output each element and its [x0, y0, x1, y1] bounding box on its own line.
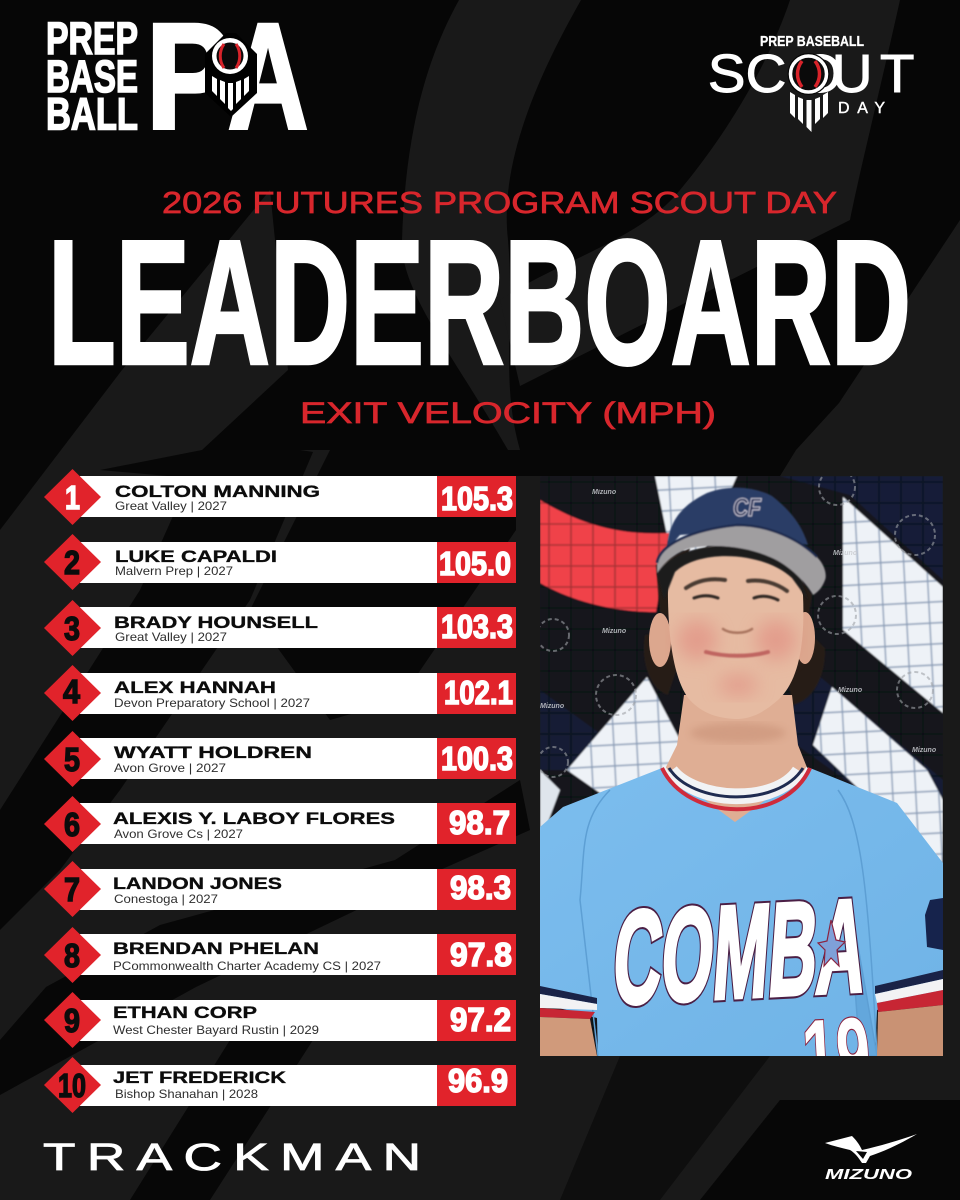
- player cap: [657, 488, 826, 600]
- row 3: 3: [64, 610, 80, 647]
- row 3: 103.3: [441, 608, 513, 645]
- row 6: 98.7: [449, 804, 510, 841]
- row 9: 9: [64, 1002, 80, 1039]
- jersey lettering: Combat: [614, 896, 864, 1008]
- jersey star: [818, 920, 845, 966]
- row 1: Great Valley | 2027: [115, 499, 227, 513]
- row 5: Avon Grove | 2027: [114, 761, 226, 775]
- logo wordmark: Prep Base Ball: BALL: [46, 88, 138, 140]
- left arm: [540, 1017, 597, 1056]
- row 8: 8: [64, 937, 80, 974]
- logo text: Day: DAY: [838, 100, 885, 117]
- row 5: WYATT HOLDREN: [114, 743, 312, 762]
- logo: Prep Baseball Scout Day: [708, 33, 915, 132]
- row 5: [44, 731, 516, 787]
- row 3: [44, 600, 516, 656]
- row 8: PCommonwealth Charter Academy CS | 2027: [113, 959, 381, 973]
- row 6: ALEXIS Y. LABOY FLORES: [113, 809, 395, 828]
- row 4: Devon Preparatory School | 2027: [114, 696, 310, 710]
- logo: Prep Baseball PA: [46, 0, 308, 160]
- backdrop marks: Mizuno: [540, 703, 565, 710]
- row 1: 1: [65, 479, 80, 516]
- right sleeve stripes: [875, 970, 943, 1012]
- logo text: Mizuno: MIZUNO: [825, 1166, 912, 1183]
- row 4: ALEX HANNAH: [114, 678, 276, 697]
- row 4: 102.1: [444, 674, 513, 711]
- row 1: 105.3: [441, 480, 513, 517]
- icon: scout baseball shield: [788, 53, 830, 132]
- row 4: [44, 665, 516, 721]
- player jersey: [540, 766, 943, 1056]
- row 8: [44, 927, 516, 983]
- row 3: BRADY HOUNSELL: [114, 613, 318, 632]
- row 7: [44, 861, 516, 917]
- row 2: 2: [64, 544, 80, 581]
- backdrop marks: Mizuno: [912, 747, 937, 754]
- row 2: LUKE CAPALDI: [115, 547, 277, 566]
- subheading: Exit Velocity (MPH): EXIT VELOCITY (MPH): [300, 397, 716, 430]
- row 2: [44, 534, 516, 590]
- row 10: [44, 1057, 516, 1113]
- face blush: [677, 620, 796, 695]
- jersey seams: [580, 790, 877, 1056]
- row 9: [44, 992, 516, 1048]
- left sleeve stripes: [540, 986, 597, 1019]
- row 2: 105.0: [439, 545, 511, 582]
- heading: event name: 2026 FUTURES PROGRAM SCOUT DAY: [162, 185, 837, 220]
- row 10: 96.9: [448, 1062, 508, 1099]
- jersey number: 19: [799, 996, 873, 1116]
- player face: [668, 545, 803, 719]
- row 9: West Chester Bayard Rustin | 2029: [113, 1023, 319, 1037]
- row 6: [44, 796, 516, 852]
- logo wordmark: Prep Base Ball: PREP: [46, 13, 138, 64]
- backdrop marks: Mizuno: [602, 628, 627, 635]
- logo wordmark: Prep Base Ball: [46, 13, 138, 140]
- row 10: JET FREDERICK: [113, 1068, 287, 1087]
- player photo: [540, 476, 943, 1056]
- row 9: 97.2: [450, 1001, 511, 1038]
- undershirt and collar: [662, 768, 810, 809]
- logo: Mizuno: [825, 1134, 917, 1183]
- logo small text: Prep Baseball: PREP BASEBALL: [760, 33, 864, 50]
- backdrop marks: Mizuno: [592, 489, 617, 496]
- row 5: 100.3: [441, 740, 513, 777]
- backdrop logos: [537, 469, 935, 777]
- row 8: 97.8: [450, 936, 512, 973]
- row 1: [44, 469, 516, 525]
- backdrop marks: Mizuno: [838, 687, 863, 694]
- row 7: LANDON JONES: [113, 874, 282, 893]
- row 2: Malvern Prep | 2027: [115, 564, 233, 578]
- backdrop marks: [540, 489, 937, 754]
- player neck: [662, 695, 810, 825]
- player hair: [644, 548, 825, 705]
- player cap: CF: [733, 494, 762, 522]
- icon: Mizuno runbird: [825, 1134, 917, 1163]
- photo backdrop: [540, 476, 943, 1056]
- row 1: COLTON MANNING: [115, 482, 320, 501]
- icon: baseball shield: [205, 33, 257, 117]
- logo large text: Scout: SCOUT: [708, 43, 915, 104]
- row 4: 4: [63, 673, 81, 710]
- sleeve patch: [925, 898, 943, 950]
- right arm: [877, 1005, 943, 1056]
- row 8: BRENDAN PHELAN: [113, 939, 319, 958]
- row 7: 7: [64, 871, 80, 908]
- leaderboard list: [44, 469, 516, 1113]
- row 6: 6: [64, 806, 80, 843]
- row 7: 98.3: [450, 869, 511, 906]
- row 7: Conestoga | 2027: [114, 892, 218, 906]
- row 10: 10: [58, 1067, 86, 1104]
- chin shadow: [690, 723, 786, 743]
- backdrop marks: Mizuno: [833, 550, 858, 557]
- logo: Trackman: TRACKMAN: [43, 1135, 421, 1178]
- row 9: ETHAN CORP: [113, 1003, 257, 1022]
- row 6: Avon Grove Cs | 2027: [114, 827, 243, 841]
- player ears: [649, 612, 815, 667]
- row 3: Great Valley | 2027: [115, 630, 227, 644]
- logo letters: PA: [146, 0, 308, 160]
- row 5: 5: [64, 741, 80, 778]
- logo wordmark: Prep Base Ball: BASE: [46, 51, 138, 102]
- row 10: Bishop Shanahan | 2028: [115, 1087, 258, 1101]
- face features: [686, 579, 787, 656]
